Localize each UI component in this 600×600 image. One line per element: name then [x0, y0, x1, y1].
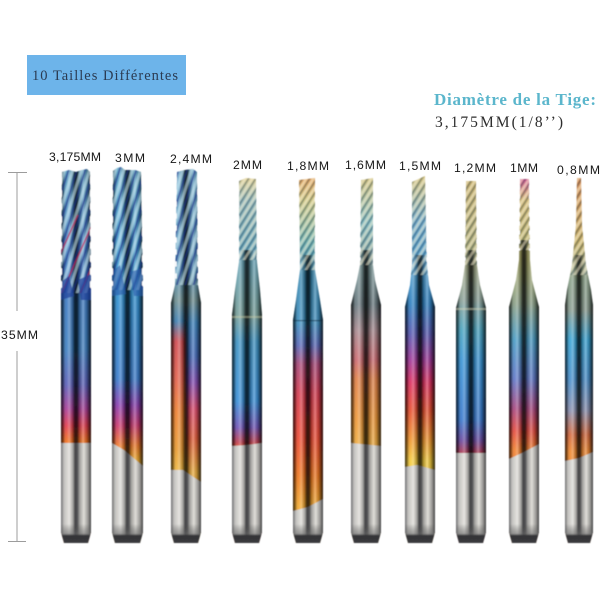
- bit: 2,4MM: [171, 165, 201, 545]
- bit: 1,2MM: [456, 165, 486, 545]
- size labels: 1,6MM: [345, 158, 386, 172]
- text block: shank diameter: 3,175MM(1/8’’): [435, 114, 563, 131]
- bit: 1,6MM: [351, 165, 381, 545]
- size labels: 1,8MM: [287, 159, 329, 173]
- bit: 3,175MM: [61, 165, 91, 545]
- size labels: 0,8MM: [557, 163, 600, 177]
- size labels: 1,5MM: [399, 159, 441, 173]
- size labels: 2MM: [233, 158, 262, 172]
- size labels: 3,175MM: [49, 150, 101, 164]
- size labels: 1MM: [510, 161, 538, 175]
- bit: 2MM: [232, 165, 262, 545]
- size labels: 1,2MM: [454, 161, 496, 175]
- bit: 1,5MM: [405, 165, 435, 545]
- size labels: [49, 150, 600, 177]
- size labels: 2,4MM: [170, 152, 212, 166]
- callout: 10 sizes banner: [27, 55, 186, 95]
- dimension: 35MM overall length: 35MM: [1, 328, 38, 342]
- text block: shank diameter: Diamètre de la Tige:: [434, 90, 596, 109]
- bit: 1,8MM: [293, 165, 323, 545]
- dimension: 35MM overall length: [1, 172, 38, 542]
- bit: 0,8MM: [565, 165, 593, 545]
- text block: shank diameter: [434, 90, 596, 131]
- size labels: 3MM: [115, 151, 145, 165]
- callout: 10 sizes banner: 10 Tailles Différentes: [32, 68, 178, 84]
- bit: 3MM: [112, 165, 143, 545]
- bit: 1MM: [509, 165, 539, 545]
